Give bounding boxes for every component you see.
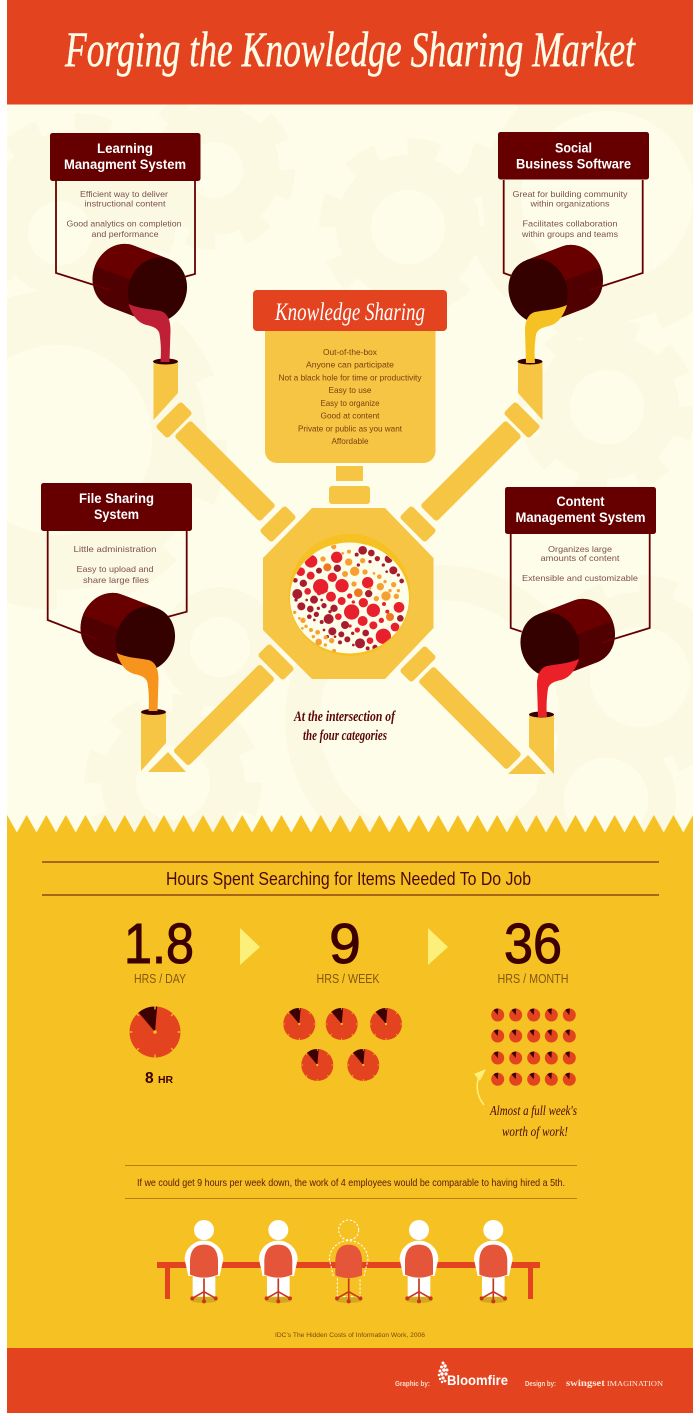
icon: single clock	[130, 1006, 180, 1058]
statement	[125, 1166, 577, 1198]
heading: Management System	[516, 510, 646, 525]
icon: bucket pouring yellow	[499, 236, 612, 363]
text block: Private or public as you want	[298, 424, 403, 434]
stat: 1.8 hrs per day: 1.8	[124, 912, 194, 976]
caption: at the intersection: the four categories	[303, 728, 387, 744]
text block: within groups and teams	[521, 229, 618, 239]
stat: 36 hrs per month: 36	[504, 912, 562, 976]
person 2	[259, 1220, 298, 1303]
text block: within organizations	[529, 198, 610, 208]
pipes top right	[399, 362, 542, 543]
heading	[50, 133, 200, 181]
text block: Easy to upload and	[76, 564, 154, 574]
text block: Efficient way to deliver	[80, 189, 168, 199]
caption: at the intersection	[293, 709, 397, 744]
text block: and performance	[92, 229, 159, 239]
pipes top left	[154, 362, 297, 543]
person 1	[185, 1220, 223, 1303]
text block: instructional content	[84, 198, 166, 208]
heading: File Sharing	[79, 491, 154, 506]
text block	[66, 189, 182, 239]
text block: Little administration	[74, 544, 157, 554]
credit: graphic by: Graphic by:	[395, 1381, 430, 1388]
twenty small clocks	[491, 1008, 576, 1086]
background: cream panel	[7, 100, 693, 840]
panel: Knowledge Sharing	[253, 290, 447, 463]
icon: bucket pouring red	[511, 590, 624, 717]
heading: Managment System	[64, 157, 186, 172]
label: 8 hr: 8 HR	[145, 1070, 174, 1087]
arrow	[240, 928, 260, 965]
text block: Anyone can participate	[306, 360, 394, 370]
text block: share large files	[83, 575, 149, 585]
text block	[74, 544, 157, 585]
icon: bucket pouring orange	[71, 584, 184, 711]
panel: Social Business Software	[498, 132, 649, 363]
caption: at the intersection: At the intersection of	[293, 709, 397, 725]
icon: bucket pouring red	[83, 235, 196, 362]
stat: 9 hrs per week	[316, 912, 380, 986]
heading: Social	[555, 140, 592, 156]
text block: Good analytics on completion	[66, 218, 182, 228]
text block: Not a black hole for time or productivity	[278, 372, 422, 382]
octagon hub	[263, 508, 434, 679]
panel: hours section background	[7, 832, 693, 1348]
text block: amounts of content	[540, 553, 620, 563]
logo: Bloomfire	[438, 1362, 508, 1388]
heading	[505, 487, 656, 534]
statement: If we could get 9 hours per week down, the work of 4 employees would be comparable to having hired a 5th.	[137, 1177, 565, 1189]
text block: Great for building community	[512, 189, 628, 199]
text block: Organizes large	[548, 544, 612, 554]
callout: almost a full week: Almost a full week's	[489, 1104, 577, 1119]
heading: Knowledge Sharing	[274, 299, 425, 326]
panel: Content Management System	[505, 487, 656, 717]
credit: design by: Design by:	[525, 1381, 556, 1388]
panel: Learning Management System	[50, 133, 200, 362]
arrow: curved pointer	[474, 1069, 486, 1105]
text block: Affordable	[332, 436, 369, 446]
callout: almost a full week: worth of work!	[502, 1125, 568, 1140]
heading: System	[94, 507, 139, 522]
stat: 36 hrs per month: HRS / MONTH	[498, 972, 568, 986]
header banner	[7, 0, 693, 104]
heading: Business Software	[516, 156, 631, 172]
heading: Content	[556, 494, 605, 509]
five clocks	[283, 1008, 402, 1081]
text block: Facilitates collaboration	[522, 218, 618, 228]
arrow	[428, 928, 448, 965]
stat: 1.8 hrs per day: HRS / DAY	[134, 972, 187, 986]
callout: almost a full week	[489, 1104, 577, 1140]
background gears	[0, 63, 700, 875]
pipe openings	[141, 358, 554, 718]
text block: Extensible and customizable	[522, 573, 638, 583]
heading	[498, 132, 649, 180]
pipes bottom right	[399, 645, 554, 774]
text block	[278, 347, 422, 446]
person 3: dashed hire	[329, 1220, 368, 1303]
person 4	[400, 1220, 438, 1303]
text block: Easy to organize	[320, 398, 380, 408]
table	[157, 1262, 540, 1299]
logo: swingset imagination: swingset IMAGINATION	[566, 1378, 663, 1388]
logo: Bloomfire: Bloomfire	[447, 1373, 508, 1388]
person 5	[474, 1220, 513, 1303]
section title	[42, 862, 659, 895]
text block: Easy to use	[328, 385, 372, 395]
heading: Learning	[97, 141, 153, 156]
dots	[292, 544, 404, 653]
text block: Good at content	[320, 410, 380, 420]
pipes bottom left	[141, 643, 295, 772]
footer	[7, 1348, 693, 1413]
text block	[512, 189, 628, 239]
heading	[41, 483, 192, 531]
panel: File Sharing System	[41, 483, 192, 711]
stat: 9 hrs per week: HRS / WEEK	[316, 972, 380, 986]
text block: Out-of-the-box	[323, 347, 378, 357]
zigzag edge	[7, 815, 693, 832]
stat: 9 hrs per week: 9	[329, 912, 361, 976]
text block	[522, 544, 638, 583]
section title: Hours Spent Searching for Items Needed To Do Job	[166, 868, 531, 889]
connector pieces	[329, 466, 370, 504]
source: IDC's The Hidden Costs of Information Work, 2006	[275, 1332, 425, 1339]
